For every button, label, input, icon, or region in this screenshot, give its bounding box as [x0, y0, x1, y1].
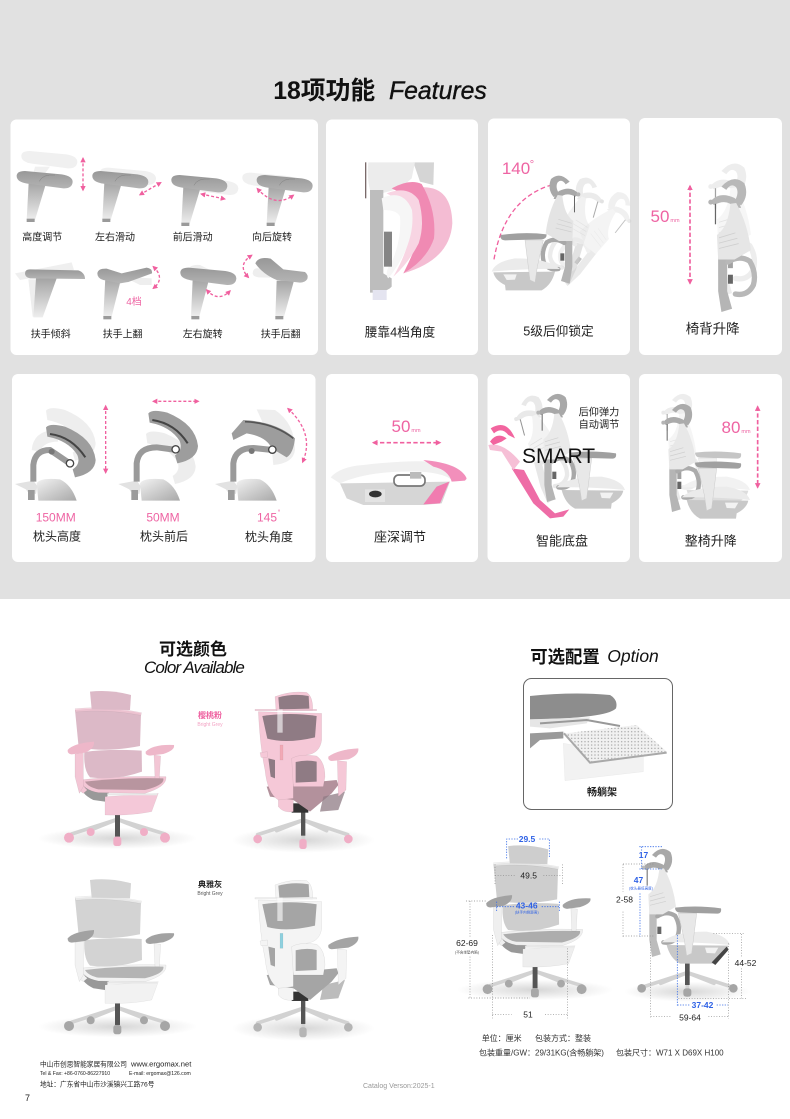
panel: armrest adjustments — [10, 120, 318, 355]
panel: back lift — [639, 118, 782, 355]
company footer: Tel & Fax: +86-0760-86227910 — [40, 1071, 110, 1077]
value: 80 — [722, 418, 740, 437]
arrow — [687, 186, 692, 283]
values and labels: 150MM — [36, 510, 76, 524]
value: 50 — [651, 207, 669, 226]
title: 18项功能 Features — [273, 77, 487, 105]
dimension values: (枕头最低高度) — [629, 886, 653, 890]
dimension values — [455, 834, 539, 1020]
dimension diagram: side view — [616, 847, 757, 1022]
icon: chair lift — [661, 394, 758, 519]
unit: mm — [411, 428, 421, 434]
value: 50 — [392, 417, 410, 436]
grey colour label — [197, 879, 223, 897]
label: 椅背升降 — [686, 322, 740, 336]
dimension values: 43-46 — [516, 900, 538, 910]
company footer: 地址：广东省中山市沙溪镇兴工路76号 — [40, 1080, 155, 1088]
panel: seat depth — [326, 374, 478, 562]
values and labels: 145 — [257, 510, 277, 524]
packaging specs: 单位：厘米 — [482, 1033, 522, 1043]
packaging specs: 包装重量/GW：29/31KG(含畅躺架) — [479, 1048, 604, 1058]
company footer: 中山市创思智能家居有限公司 — [40, 1060, 127, 1068]
heading: colors: 可选颜色 — [159, 639, 227, 659]
chair: grey back — [232, 880, 375, 1041]
armrest labels: 扶手上翻 — [103, 328, 143, 340]
label: 智能底盘 — [536, 534, 588, 548]
armrest labels: 左右旋转 — [183, 328, 223, 340]
dimension values: 59-64 — [679, 1012, 701, 1022]
chair: pink front — [37, 691, 197, 849]
dimension values: 44-52 — [735, 958, 757, 968]
label: 4 positions: 4档 — [126, 295, 142, 308]
armrest labels: 前后滑动 — [173, 230, 213, 244]
pink colour label: Bright Grey — [197, 722, 223, 728]
dimension values — [616, 850, 757, 1022]
dimension values: 37-42 — [692, 1000, 714, 1010]
chair: side dimension view — [624, 849, 751, 1002]
angle value: 140 — [502, 159, 530, 178]
dimension values: 29.5 — [519, 834, 536, 844]
armrest labels: 扶手后翻 — [261, 328, 301, 340]
company footer: E-mail: ergomax@126.com — [129, 1071, 191, 1077]
icon: seat depth — [331, 443, 467, 505]
smart label: SMART — [522, 445, 595, 468]
grey colour label: Bright Grey — [197, 891, 223, 897]
armrest labels: 向后旋转 — [252, 230, 292, 244]
chair: grey front — [37, 879, 197, 1037]
dimension values: (不含坐垫内陷) — [455, 950, 479, 954]
company footer: www.ergomax.net — [130, 1060, 192, 1068]
packaging specs: 包装尺寸：W71 X D69X H100 — [616, 1048, 724, 1058]
icon: eight armrest illustrations — [15, 151, 313, 319]
pink colour label: 樱桃粉 — [198, 710, 222, 720]
heading: colors — [144, 639, 244, 677]
heading: option: 可选配置 — [530, 647, 600, 667]
dimension values: 17 — [639, 850, 648, 860]
company footer — [40, 1060, 192, 1088]
grey colour label: 典雅灰 — [198, 879, 222, 889]
page number: 7 — [25, 1093, 30, 1103]
values and labels: 枕头前后 — [140, 528, 188, 544]
arrows — [106, 401, 307, 473]
icon: three headrest adjustments — [15, 401, 307, 501]
dimension lines — [466, 839, 567, 1018]
packaging specs — [479, 1033, 724, 1058]
label: 整椅升降 — [685, 534, 737, 548]
heading: option — [530, 646, 659, 667]
icon: footrest — [530, 694, 667, 781]
icon: lumbar support — [366, 162, 452, 300]
heading: colors: Color Available — [144, 658, 244, 677]
dimension values: (扶手内侧距离) — [515, 910, 539, 914]
icon: backrest side view — [690, 163, 754, 312]
values and labels: ° — [278, 508, 281, 516]
unit: mm — [670, 218, 680, 224]
note: 自动调节 — [579, 418, 619, 431]
arrow — [373, 440, 440, 445]
label: 座深调节 — [374, 530, 426, 544]
note: 后仰弹力 — [579, 406, 619, 418]
label: 畅躺架 — [587, 786, 617, 798]
values and labels: 枕头高度 — [33, 528, 81, 544]
catalog version: Catalog Verson:2025-1 — [363, 1083, 435, 1090]
arrows: armrest motions — [140, 183, 293, 297]
dimension values: 49.5 — [520, 870, 537, 880]
panel: 5-stage recline — [488, 118, 642, 355]
heading: option: Option — [607, 646, 659, 666]
armrest labels — [22, 230, 301, 340]
armrest labels: 高度调节 — [22, 230, 62, 244]
dimension diagram: front view — [455, 834, 613, 1020]
panel: lumbar 4 angle — [326, 120, 478, 355]
icon: reclining chair with angle arc — [492, 174, 642, 293]
arrow — [755, 407, 760, 487]
label: 腰靠4档角度 — [365, 324, 436, 340]
panel: overall lift — [639, 374, 782, 562]
unit: mm — [741, 429, 751, 435]
chair: pink back — [232, 692, 375, 853]
icon: chair with pink recline ghost — [488, 392, 625, 518]
panel: headrest — [12, 374, 316, 562]
panel: smart chassis — [488, 374, 630, 562]
panel: footrest option — [524, 678, 672, 810]
dimension values: 62-69 — [456, 938, 478, 948]
chair: front dimension view — [457, 845, 613, 1000]
degree mark: ° — [530, 159, 534, 171]
dimension values: 51 — [523, 1010, 533, 1020]
grey features background — [0, 0, 790, 599]
dimension lines — [623, 847, 746, 1018]
armrest labels: 左右滑动 — [95, 230, 135, 244]
pink colour label — [197, 710, 223, 728]
values and labels: 50MM — [146, 510, 180, 524]
arrow: height — [81, 158, 85, 190]
values and labels — [33, 508, 293, 544]
note — [579, 406, 619, 431]
dimension values: 2-58 — [616, 894, 633, 904]
packaging specs: 包装方式：整装 — [535, 1033, 591, 1043]
values and labels: 枕头角度 — [245, 529, 293, 544]
armrest labels: 扶手倾斜 — [31, 328, 71, 340]
dimension values: 47 — [634, 875, 643, 885]
label: 5级后仰锁定 — [523, 324, 594, 338]
